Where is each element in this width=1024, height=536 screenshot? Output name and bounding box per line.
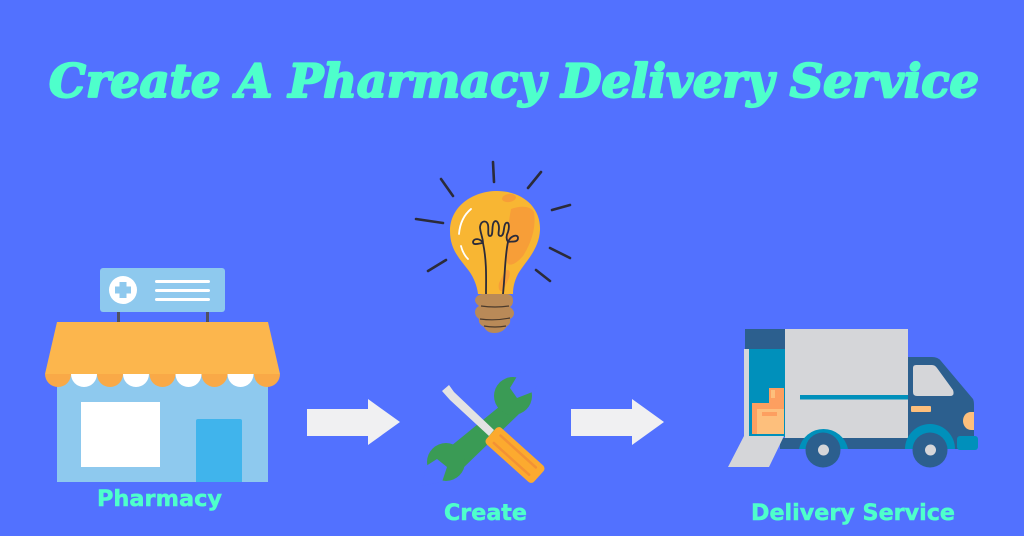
shop door — [196, 419, 242, 482]
icon: wrench and screwdriver — [422, 372, 546, 486]
truck cargo boxes — [752, 388, 784, 434]
label: Delivery Service: Delivery Service — [751, 501, 955, 526]
truck bumper — [957, 436, 978, 450]
arrow: pharmacy to create — [307, 399, 400, 445]
truck cargo interior — [744, 349, 785, 437]
shop sign — [100, 268, 225, 312]
shop sign posts — [117, 311, 120, 323]
truck top panel — [745, 329, 785, 349]
truck cab window — [913, 365, 954, 396]
awning scallops — [45, 374, 280, 387]
icon: light bulb — [416, 162, 570, 333]
bulb glass — [450, 191, 540, 294]
truck side stripe — [800, 395, 908, 400]
bulb shading — [506, 207, 535, 265]
truck rear wheel — [799, 429, 848, 468]
screwdriver handle — [484, 425, 546, 485]
arrow: create to delivery — [571, 399, 664, 445]
screwdriver shaft — [442, 385, 494, 436]
truck ramp — [728, 436, 784, 467]
label: Create: Create — [444, 501, 527, 526]
truck front wheel — [905, 424, 955, 468]
shop window — [81, 402, 160, 467]
icon: pharmacy shop — [45, 268, 280, 482]
truck door handle — [911, 406, 931, 412]
wrench — [422, 372, 540, 486]
truck headlight — [963, 412, 974, 430]
truck cab — [908, 357, 974, 449]
label: Pharmacy: Pharmacy — [97, 487, 222, 512]
shop building — [57, 370, 268, 482]
truck cargo box — [785, 329, 908, 438]
bulb rays — [416, 162, 570, 281]
awning — [45, 322, 280, 374]
bulb highlights — [459, 209, 471, 234]
bulb base — [475, 294, 514, 333]
title: Create A Pharmacy Delivery Service — [49, 54, 979, 108]
bulb filament — [473, 221, 518, 294]
icon: delivery truck — [728, 329, 978, 468]
truck chassis — [780, 438, 958, 449]
